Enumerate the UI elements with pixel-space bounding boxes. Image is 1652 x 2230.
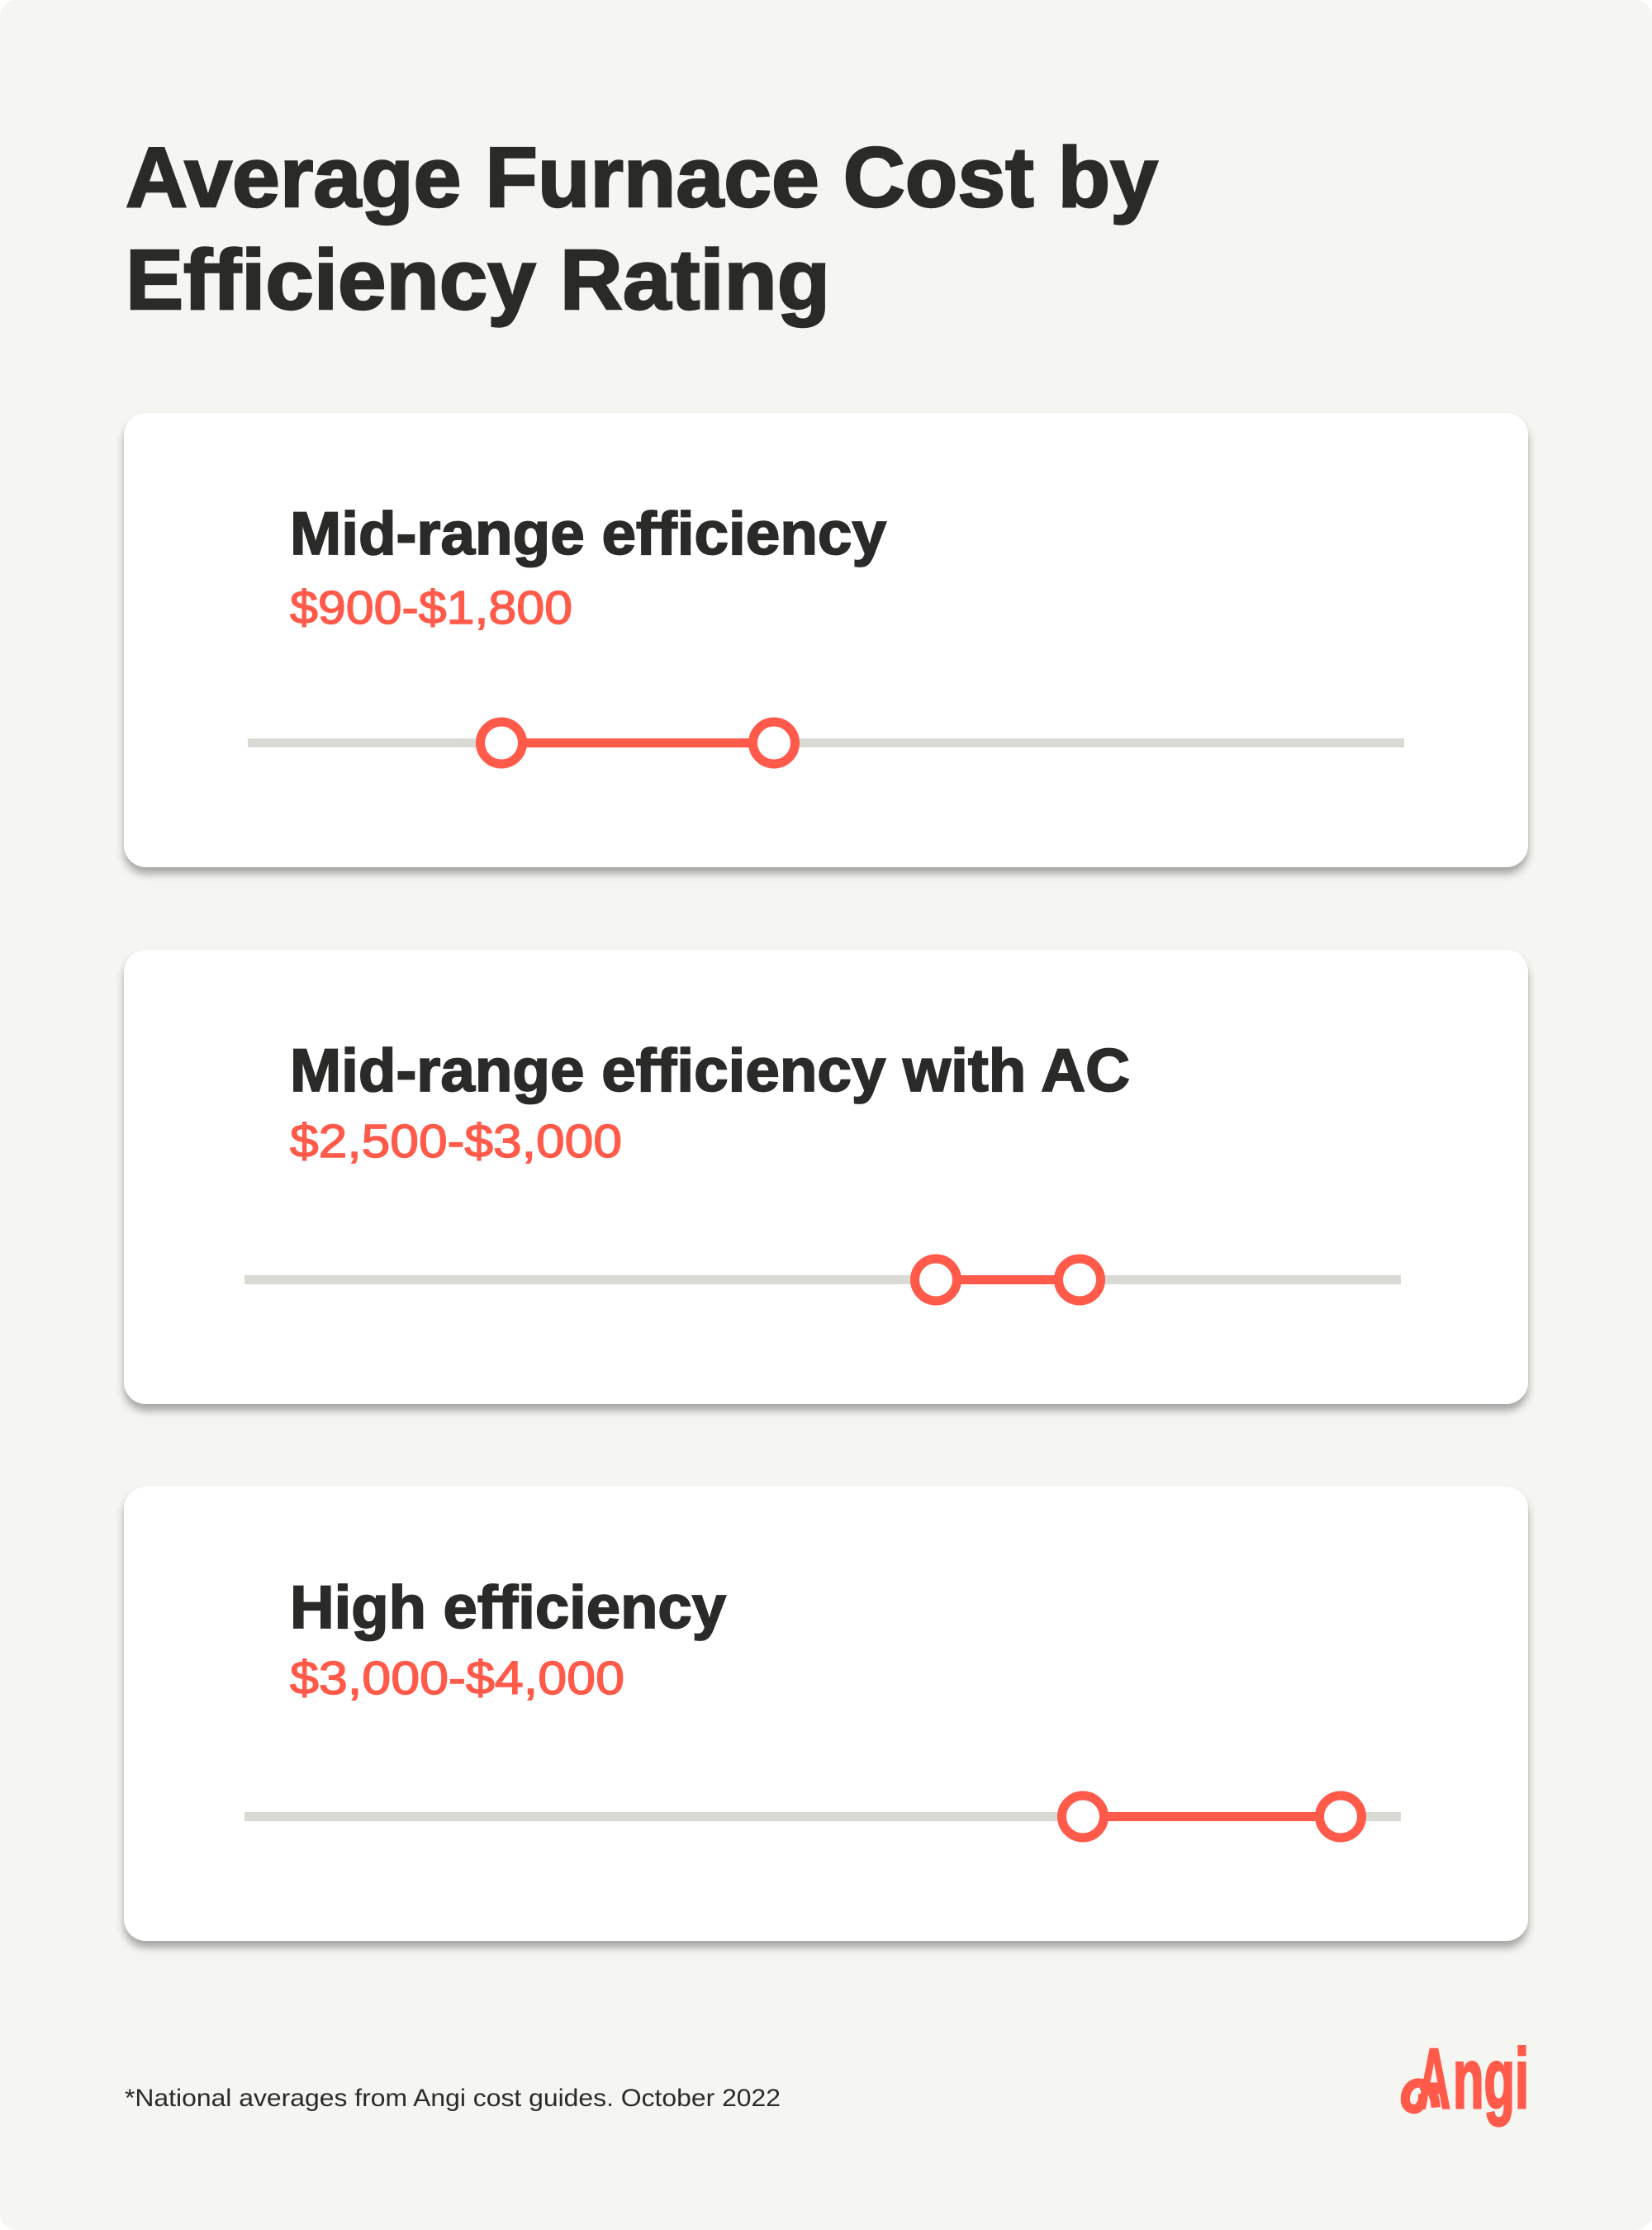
icon: Angi logo: [1405, 2031, 1529, 2126]
heading: mid-range efficiency: Mid-range efficiency: [290, 501, 886, 567]
title: Efficiency Rating: [126, 232, 830, 327]
heading: mid-range efficiency with AC: Mid-range efficiency with AC: [290, 1037, 1130, 1104]
panel: high efficiency: [124, 1487, 1528, 1941]
range slider: $900-$1,800: [248, 722, 1404, 764]
heading: high efficiency: High efficiency: [290, 1574, 726, 1641]
title: [126, 130, 1158, 327]
price: high efficiency: $3,000-$4,000: [290, 1652, 624, 1705]
panel: mid-range efficiency: [124, 413, 1528, 867]
icon: Angi logo: A: [1417, 2031, 1450, 2126]
icon: Angi logo: ngi: [1453, 2031, 1529, 2126]
footnote: *National averages from Angi cost guides. October 2022: [125, 2085, 781, 2112]
price: mid-range efficiency with AC: $2,500-$3,000: [290, 1115, 622, 1168]
panel: mid-range efficiency with AC: [124, 950, 1528, 1404]
range slider: $2,500-$3,000: [244, 1259, 1401, 1301]
title: Average Furnace Cost by: [126, 130, 1158, 225]
range slider: $3,000-$4,000: [244, 1796, 1401, 1838]
price: mid-range efficiency: $900-$1,800: [290, 581, 572, 634]
